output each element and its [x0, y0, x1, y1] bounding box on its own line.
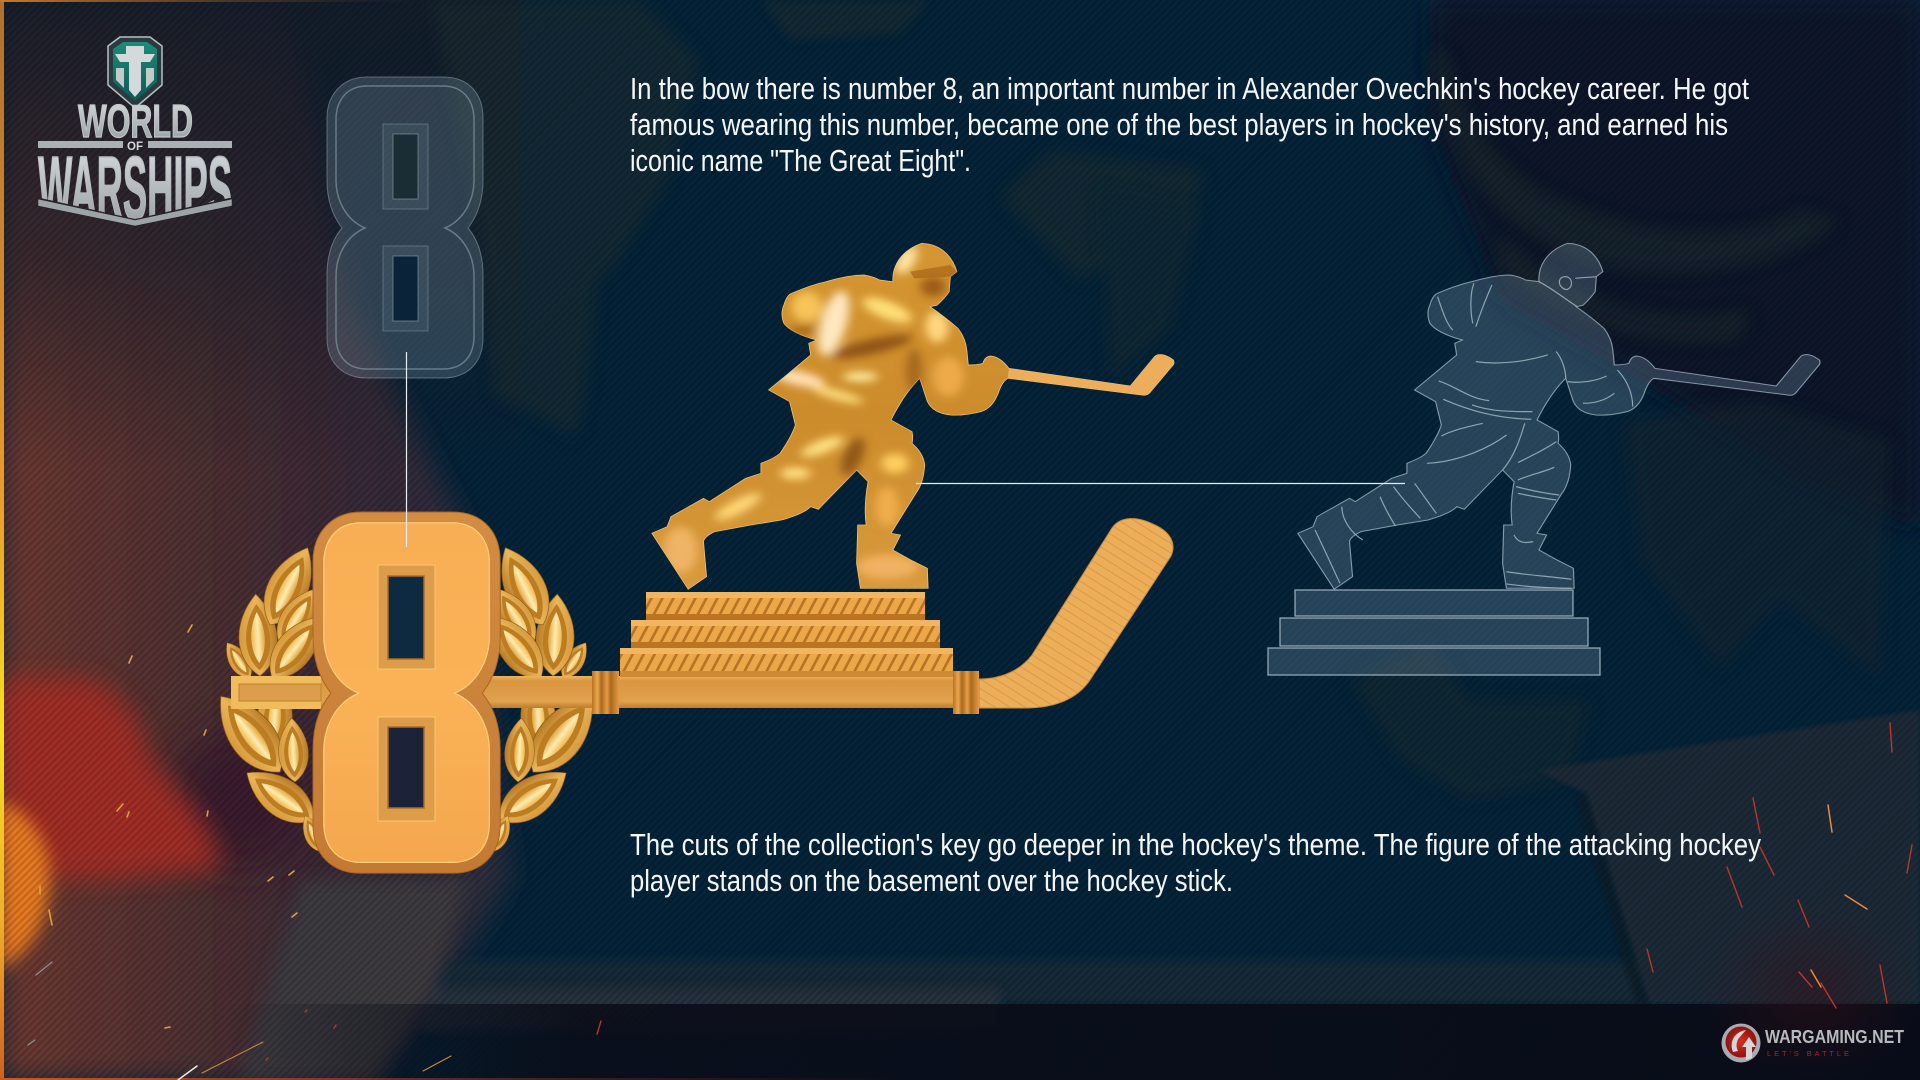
gold key	[203, 243, 1174, 873]
wargaming tagline: LET'S BATTLE	[1767, 1049, 1849, 1058]
gold hockey player statue	[652, 243, 1174, 589]
small stick	[1008, 355, 1174, 395]
faint map landmasses	[430, 0, 1890, 800]
red glow shape	[0, 678, 222, 880]
text block: key cuts	[630, 827, 1761, 898]
ghost number 8 outline	[327, 77, 483, 378]
wargaming emblem	[1722, 1024, 1760, 1062]
key shaft	[231, 676, 953, 709]
logo wordmark: world: WORLD	[78, 95, 193, 147]
ghost hockey player outline	[1298, 243, 1820, 589]
connector line: number 8	[406, 352, 408, 547]
logo bars	[38, 141, 232, 148]
collars	[592, 671, 979, 714]
hockey stick blade	[979, 519, 1173, 708]
logo: Wargaming.net	[1722, 1024, 1904, 1062]
text block: number 8	[630, 71, 1749, 178]
player visor	[910, 265, 957, 278]
basement steps	[620, 592, 953, 677]
text block: key cuts: player stands on the basement over the hockey stick.	[630, 863, 1233, 898]
shield emblem	[108, 37, 162, 108]
ghost basement steps	[1268, 590, 1600, 675]
orange glow spot	[0, 800, 50, 970]
connector line: player	[916, 482, 1405, 484]
sparks	[28, 625, 1912, 1080]
warm left area	[0, 0, 510, 1080]
ghost folds	[1315, 277, 1633, 588]
bottom right paper	[1537, 710, 1920, 1004]
slate slab bottom left	[240, 880, 466, 1080]
floor band	[435, 960, 1640, 1004]
big gold number 8	[313, 512, 500, 873]
upper right dark region	[1430, 0, 1920, 530]
dark maroon fold	[170, 730, 310, 870]
text block: number 8: famous wearing this number, became one of the best players in hockey's history, and earned his	[630, 107, 1728, 142]
bottom strip	[0, 1004, 1920, 1080]
text: WARSHIPS	[38, 139, 232, 239]
wargaming wordmark: WARGAMING.NET	[1765, 1027, 1904, 1047]
logo plate	[38, 199, 232, 226]
text block: number 8: iconic name "The Great Eight".	[630, 143, 971, 178]
logo: World of Warships	[38, 37, 232, 239]
logo wordmark: of: OF	[127, 139, 143, 153]
wreath	[203, 539, 610, 856]
